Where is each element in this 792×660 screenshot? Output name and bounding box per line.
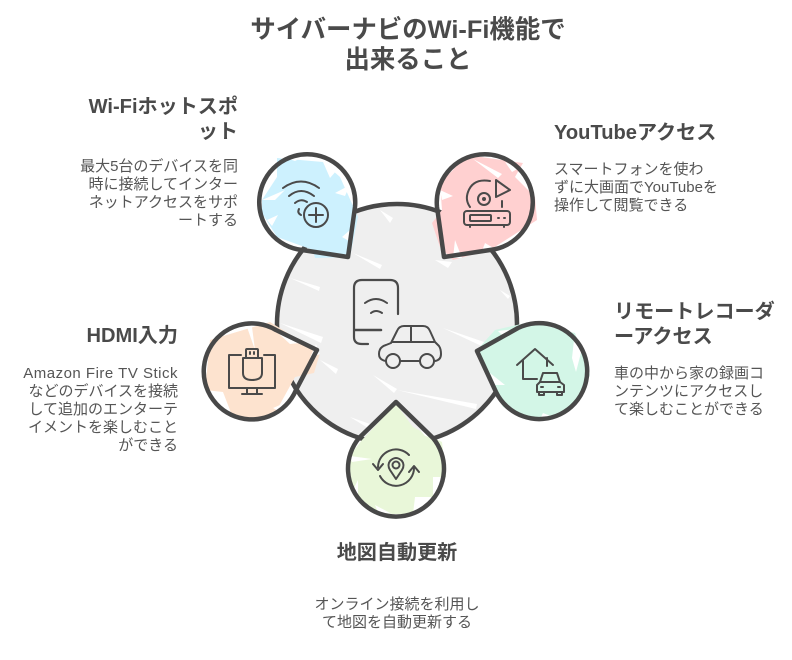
text: hdmi: などのデバイスを接続 bbox=[28, 383, 178, 400]
heading: recorder bbox=[614, 300, 775, 348]
text: map update: オンライン接続を利用し bbox=[314, 596, 480, 613]
text: youtube: 操作して閲覧できる bbox=[554, 197, 688, 214]
text: hdmi: イメントを楽しむこと bbox=[28, 419, 178, 436]
text: youtube: ずに大画面でYouTubeを bbox=[554, 179, 718, 196]
title: 出来ること bbox=[345, 46, 471, 74]
panel: recorder petal bbox=[477, 322, 590, 421]
icon: location refresh bbox=[373, 449, 419, 486]
heading: wifi hotspot bbox=[88, 96, 238, 143]
text: hdmi: して追加のエンターテ bbox=[28, 401, 178, 418]
text: recorder: て楽しむことができる bbox=[614, 401, 764, 418]
panel: wifi hotspot petal bbox=[259, 154, 358, 258]
text: hdmi: ができる bbox=[118, 437, 178, 454]
heading: recorder: ーアクセス bbox=[614, 326, 713, 348]
text: map update: て地図を自動更新する bbox=[322, 614, 472, 631]
text: wifi hotspot bbox=[80, 158, 238, 229]
heading: wifi hotspot: Wi-Fiホットスポ bbox=[89, 96, 238, 118]
text: hdmi bbox=[23, 365, 178, 454]
text: recorder: ンテンツにアクセスし bbox=[614, 383, 763, 400]
heading: recorder: リモートレコーダ bbox=[614, 301, 775, 323]
text: youtube: スマートフォンを使わ bbox=[554, 161, 704, 178]
icon: wifi plus bbox=[283, 182, 328, 227]
text: wifi hotspot: ートする bbox=[178, 212, 238, 229]
text: youtube bbox=[554, 161, 718, 214]
heading: youtube: YouTubeアクセス bbox=[554, 122, 716, 144]
heading: hdmi: HDMI入力 bbox=[86, 325, 178, 347]
panel: map update petal bbox=[348, 402, 446, 517]
heading: map update: 地図自動更新 bbox=[337, 542, 457, 564]
text: wifi hotspot: ネットアクセスをサポ bbox=[89, 194, 238, 211]
text: wifi hotspot: 最大5台のデバイスを同 bbox=[80, 158, 238, 175]
icon: home and car bbox=[517, 349, 564, 395]
text: recorder: 車の中から家の録画コ bbox=[614, 365, 764, 382]
icon: usb monitor bbox=[229, 349, 275, 394]
icon: phone wifi and car bbox=[354, 280, 441, 368]
central circle bbox=[277, 204, 517, 444]
text: hdmi: Amazon Fire TV Stick bbox=[23, 365, 178, 382]
heading: wifi hotspot: ット bbox=[198, 121, 238, 143]
text: recorder bbox=[614, 365, 764, 418]
panel: hdmi petal bbox=[204, 322, 320, 419]
title bbox=[250, 16, 566, 74]
panel: youtube petal bbox=[432, 154, 537, 260]
text: wifi hotspot: 時に接続してインター bbox=[88, 176, 238, 193]
title: サイバーナビのWi-Fi機能で bbox=[250, 16, 566, 44]
icon: disc player bbox=[464, 180, 510, 227]
text: map update bbox=[314, 596, 480, 631]
